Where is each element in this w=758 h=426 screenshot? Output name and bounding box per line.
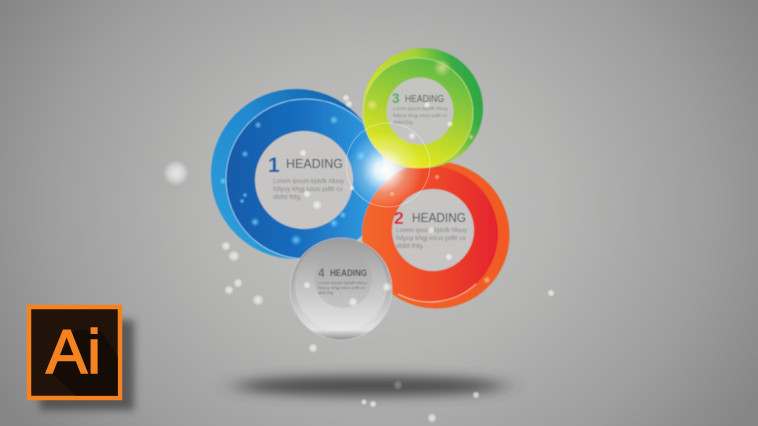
body text 3: dfdfd fhfg. (393, 120, 414, 125)
silver front ring (295, 239, 387, 331)
body text 3: Lorem ipsum kjdsfk hfuuy (393, 106, 449, 111)
panel: heading 4 silver ring (290, 238, 392, 340)
logo letters: Ai (46, 318, 101, 387)
body text 2 (396, 228, 467, 250)
body text 2: fsfyuy khgj ioiuo pdltl cv (396, 236, 466, 242)
green back ring (363, 48, 483, 168)
body text 2: dfdfd fhfg. (396, 244, 424, 250)
icon: Adobe Illustrator logo (29, 307, 134, 410)
silver ring centre (314, 250, 372, 308)
green ring centre (386, 78, 454, 144)
body text 4: fsfyuy khgj ioiuo pdlt cv (318, 285, 365, 290)
number 4: 4 (318, 266, 325, 280)
body text 4 (318, 280, 367, 295)
green front ring (363, 58, 473, 168)
orange ring centre (392, 189, 474, 271)
blue back ring (211, 89, 381, 259)
orange front ring (362, 166, 498, 302)
blue front ring (226, 99, 386, 259)
lens flare (346, 123, 430, 208)
logo drop shadow (40, 320, 134, 410)
body text 4: Lorem ipsum kjdsfk hfuuy (318, 280, 367, 285)
blue ring centre (255, 131, 353, 229)
panel: heading 3 green ring (363, 48, 483, 168)
number 1: 1 (268, 154, 280, 177)
body text 4: dfdfd fhfg. (318, 290, 334, 295)
bokeh sparkles (163, 59, 555, 423)
body text 1: Lorem ipsum kjdsfk hfuuy (273, 178, 345, 185)
heading 2: HEADING (412, 210, 466, 225)
heading 1: HEADING (286, 156, 343, 171)
heading 3: HEADING (405, 94, 444, 105)
body text 2: Lorem ipsum kjdsfk hfuuy (396, 228, 467, 234)
body text 1 (273, 178, 345, 201)
body text 3: fsfyuy khgj ioiuo pdlt cv (393, 113, 448, 118)
logo tile (29, 307, 120, 398)
panel: heading 1 blue ring (211, 89, 386, 259)
orange back ring (362, 162, 510, 308)
body text 1: dfdfd fhfg. (273, 194, 302, 201)
number 2: 2 (394, 208, 404, 228)
logo long shadow (50, 330, 118, 396)
orange ring highlight (398, 284, 476, 302)
diagram of four rings (211, 48, 510, 340)
silver back ring (290, 238, 392, 340)
ground shadow (235, 376, 505, 396)
body text 3 (393, 106, 449, 125)
body text 1: fsfyuy khgj ioiuo pdltl cv (273, 186, 344, 193)
number 3: 3 (392, 91, 400, 106)
panel: heading 2 orange ring (362, 162, 510, 308)
heading 4: HEADING (330, 268, 367, 279)
